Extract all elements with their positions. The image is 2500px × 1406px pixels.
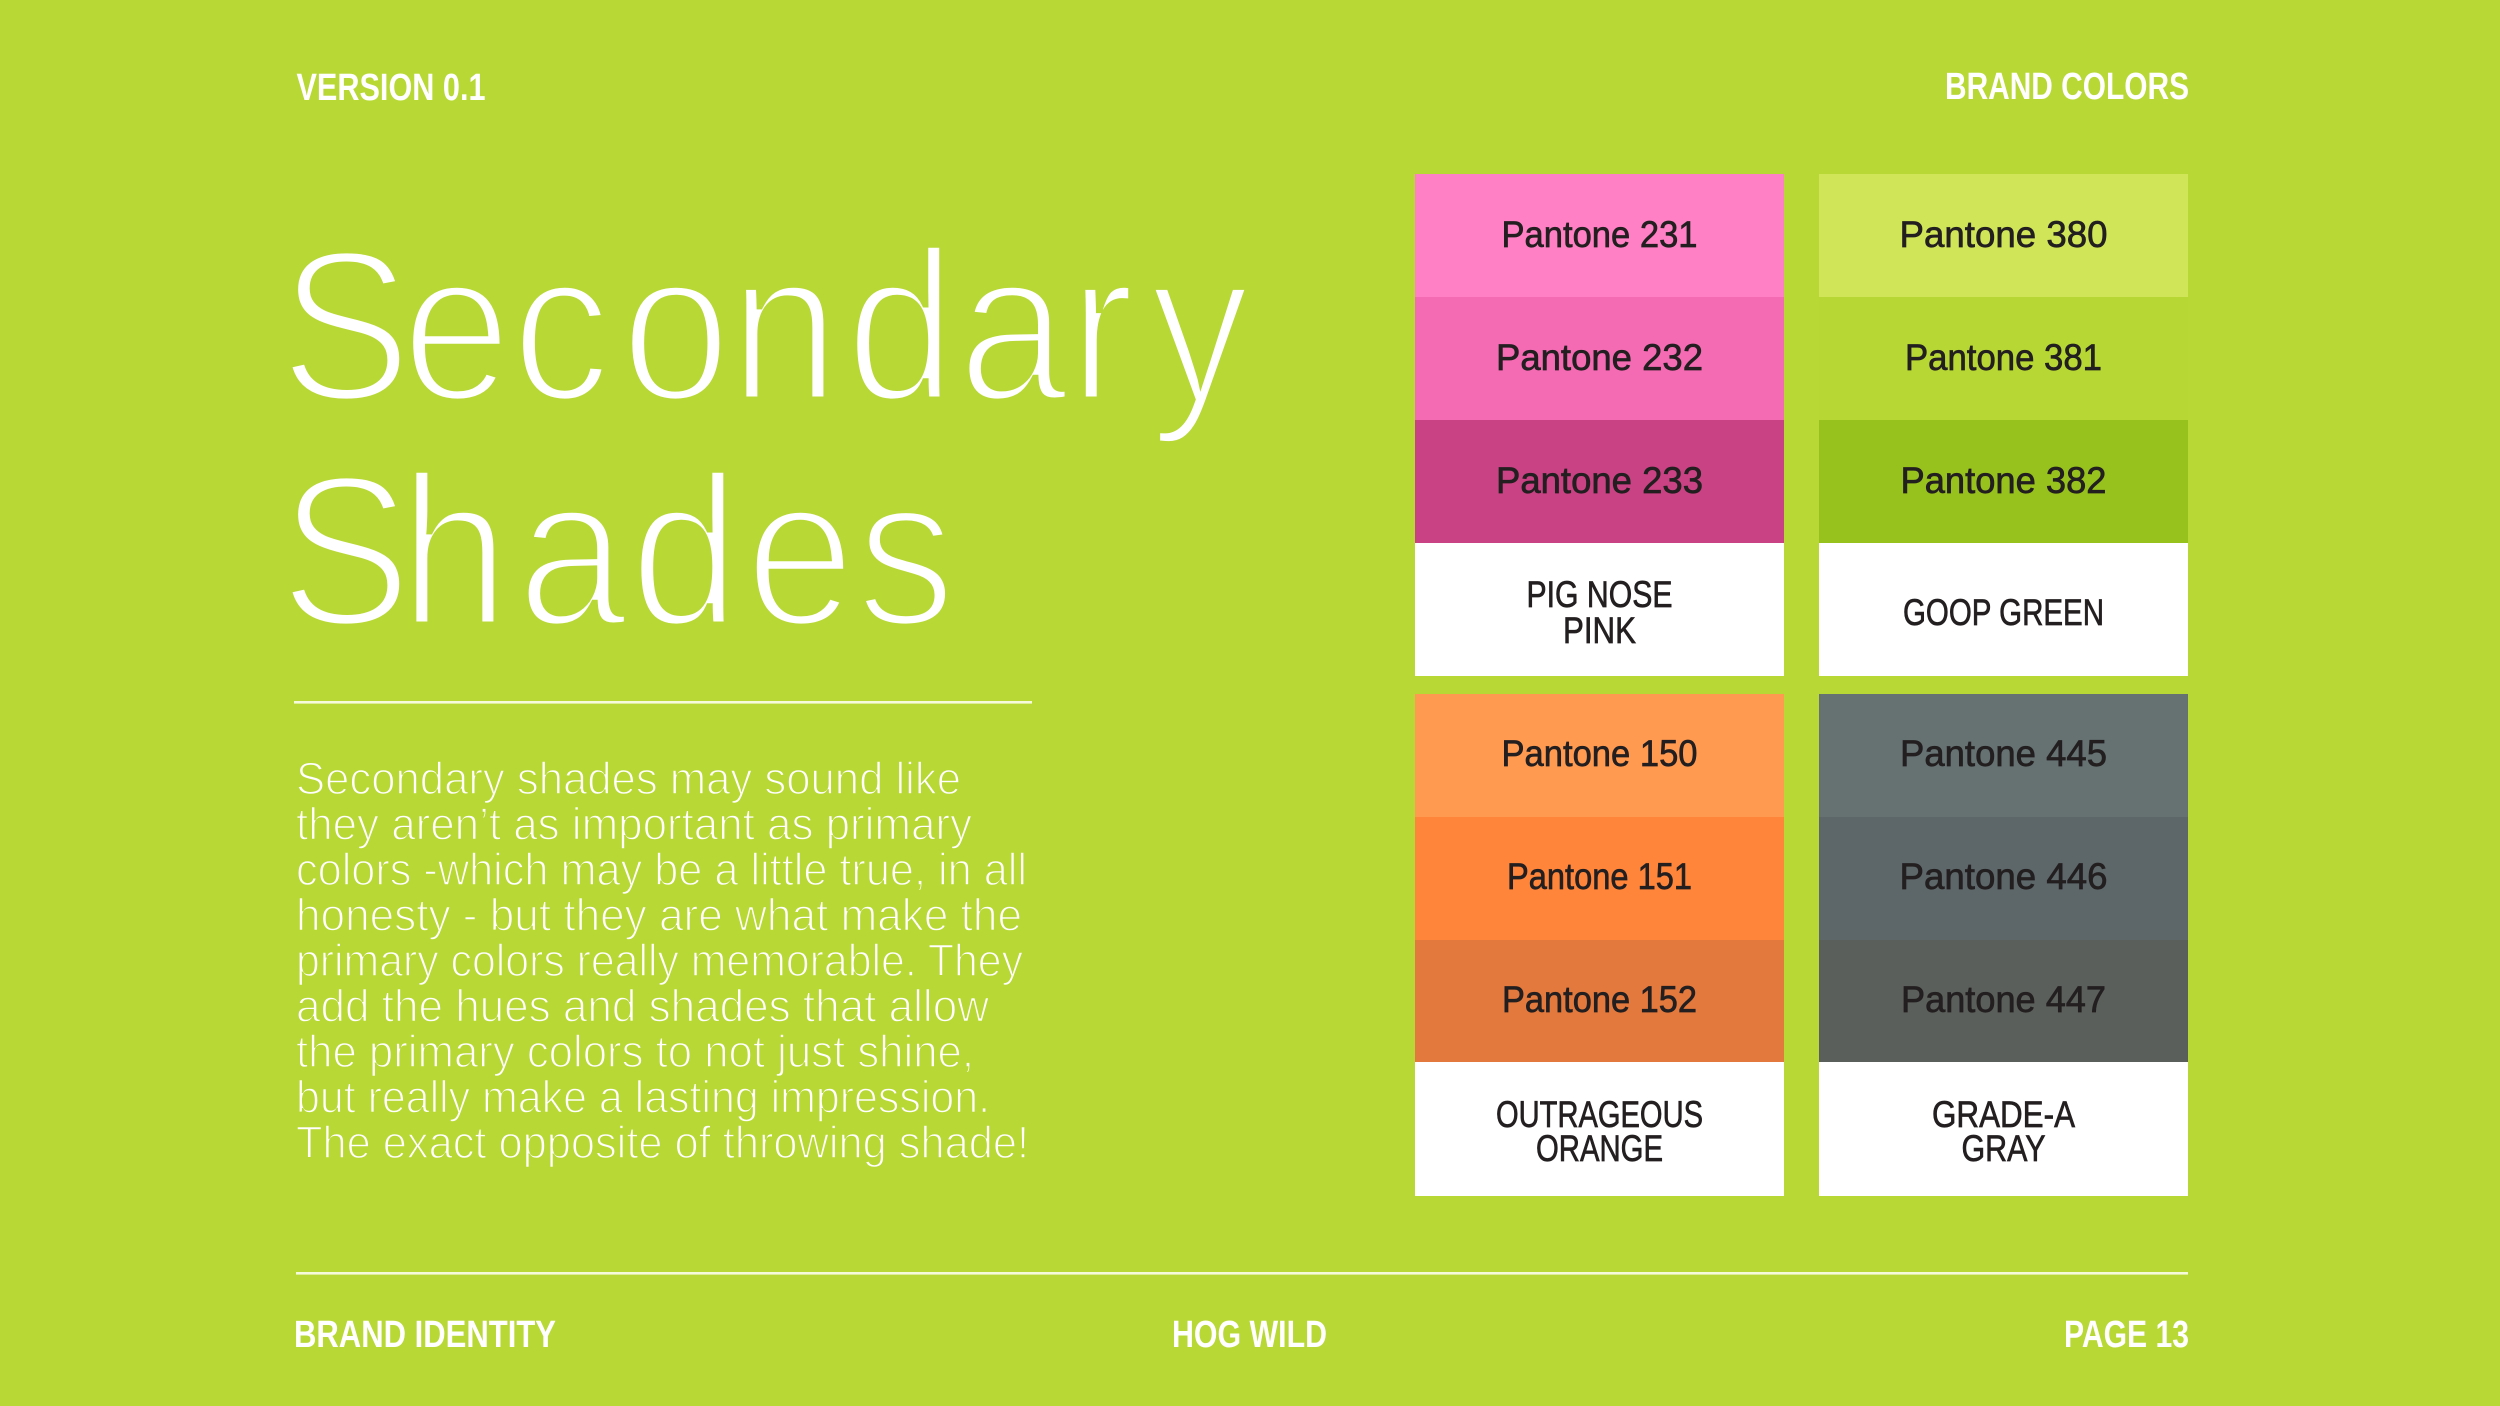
body paragraph: Secondary shades may sound like <box>296 753 961 804</box>
body paragraph: primary colors really memorable. They <box>296 935 1023 986</box>
title: Shades <box>280 430 955 671</box>
body paragraph <box>296 753 1029 1168</box>
swatch: Pantone 233 <box>1415 420 1784 543</box>
body paragraph: colors -which may be a little true, in all <box>296 844 1027 895</box>
swatch: Pantone 446 <box>1819 817 2188 940</box>
header: version label: VERSION 0.1 <box>296 67 486 109</box>
swatch: Pantone 231 <box>1415 174 1784 297</box>
swatch: Pantone 232 <box>1415 297 1784 420</box>
footer: page number: PAGE 13 <box>2064 1314 2189 1356</box>
swatch: Pantone 380 <box>1819 174 2188 297</box>
swatch: Pantone 447 <box>1819 940 2188 1062</box>
swatch: Pantone 232: Pantone 232 <box>1496 337 1703 378</box>
title: Secondary <box>280 205 1249 446</box>
swatch: Pantone 382: Pantone 382 <box>1900 460 2106 501</box>
panel: pig nose pink palette <box>1415 174 1784 676</box>
panel: grade-a gray palette <box>1819 694 2188 1196</box>
body paragraph: honesty - but they are what make the <box>296 890 1022 940</box>
label: pig nose pink <box>1415 543 1784 676</box>
swatch: Pantone 151 <box>1415 817 1784 940</box>
swatch: Pantone 445 <box>1819 694 2188 817</box>
label: goop green <box>1819 543 2188 676</box>
label: outrageous orange: ORANGE <box>1536 1128 1663 1169</box>
body paragraph: the primary colors to not just shine, <box>296 1026 974 1077</box>
label: grade-a gray <box>1819 1062 2188 1196</box>
body paragraph: The exact opposite of throwing shade! <box>296 1117 1029 1168</box>
body paragraph: but really make a lasting impression. <box>296 1072 990 1122</box>
footer: hog wild: HOG WILD <box>1172 1314 1327 1356</box>
swatch: Pantone 446: Pantone 446 <box>1900 856 2108 897</box>
title <box>280 205 1249 671</box>
header: section label: BRAND COLORS <box>1945 66 2189 108</box>
panel: goop green palette <box>1819 174 2188 676</box>
label: grade-a gray: GRAY <box>1962 1128 2046 1169</box>
label: outrageous orange: OUTRAGEOUS <box>1496 1094 1703 1135</box>
swatch: Pantone 447: Pantone 447 <box>1901 979 2106 1020</box>
label: grade-a gray: GRADE-A <box>1932 1094 2075 1135</box>
label: goop green: GOOP GREEN <box>1903 592 2104 633</box>
panel: outrageous orange palette <box>1415 694 1784 1196</box>
swatch: Pantone 152: Pantone 152 <box>1502 979 1697 1020</box>
swatch: Pantone 150: Pantone 150 <box>1502 733 1698 774</box>
swatch: Pantone 381 <box>1819 297 2188 420</box>
swatch: Pantone 382 <box>1819 420 2188 543</box>
footer: brand identity: BRAND IDENTITY <box>294 1314 556 1356</box>
body paragraph: add the hues and shades that allow <box>296 980 989 1032</box>
swatch: Pantone 152 <box>1415 940 1784 1062</box>
swatch: Pantone 380: Pantone 380 <box>1900 214 2108 255</box>
swatch: Pantone 150 <box>1415 694 1784 817</box>
label: outrageous orange <box>1415 1062 1784 1196</box>
label: pig nose pink: PIG NOSE <box>1526 574 1672 615</box>
swatch: Pantone 233: Pantone 233 <box>1496 460 1703 501</box>
body paragraph: they aren’t as important as primary <box>296 798 972 850</box>
swatch: Pantone 231: Pantone 231 <box>1502 214 1698 255</box>
label: pig nose pink: PINK <box>1563 610 1636 651</box>
swatch: Pantone 381: Pantone 381 <box>1905 337 2102 378</box>
swatch: Pantone 151: Pantone 151 <box>1507 856 1692 897</box>
swatch: Pantone 445: Pantone 445 <box>1900 733 2107 774</box>
